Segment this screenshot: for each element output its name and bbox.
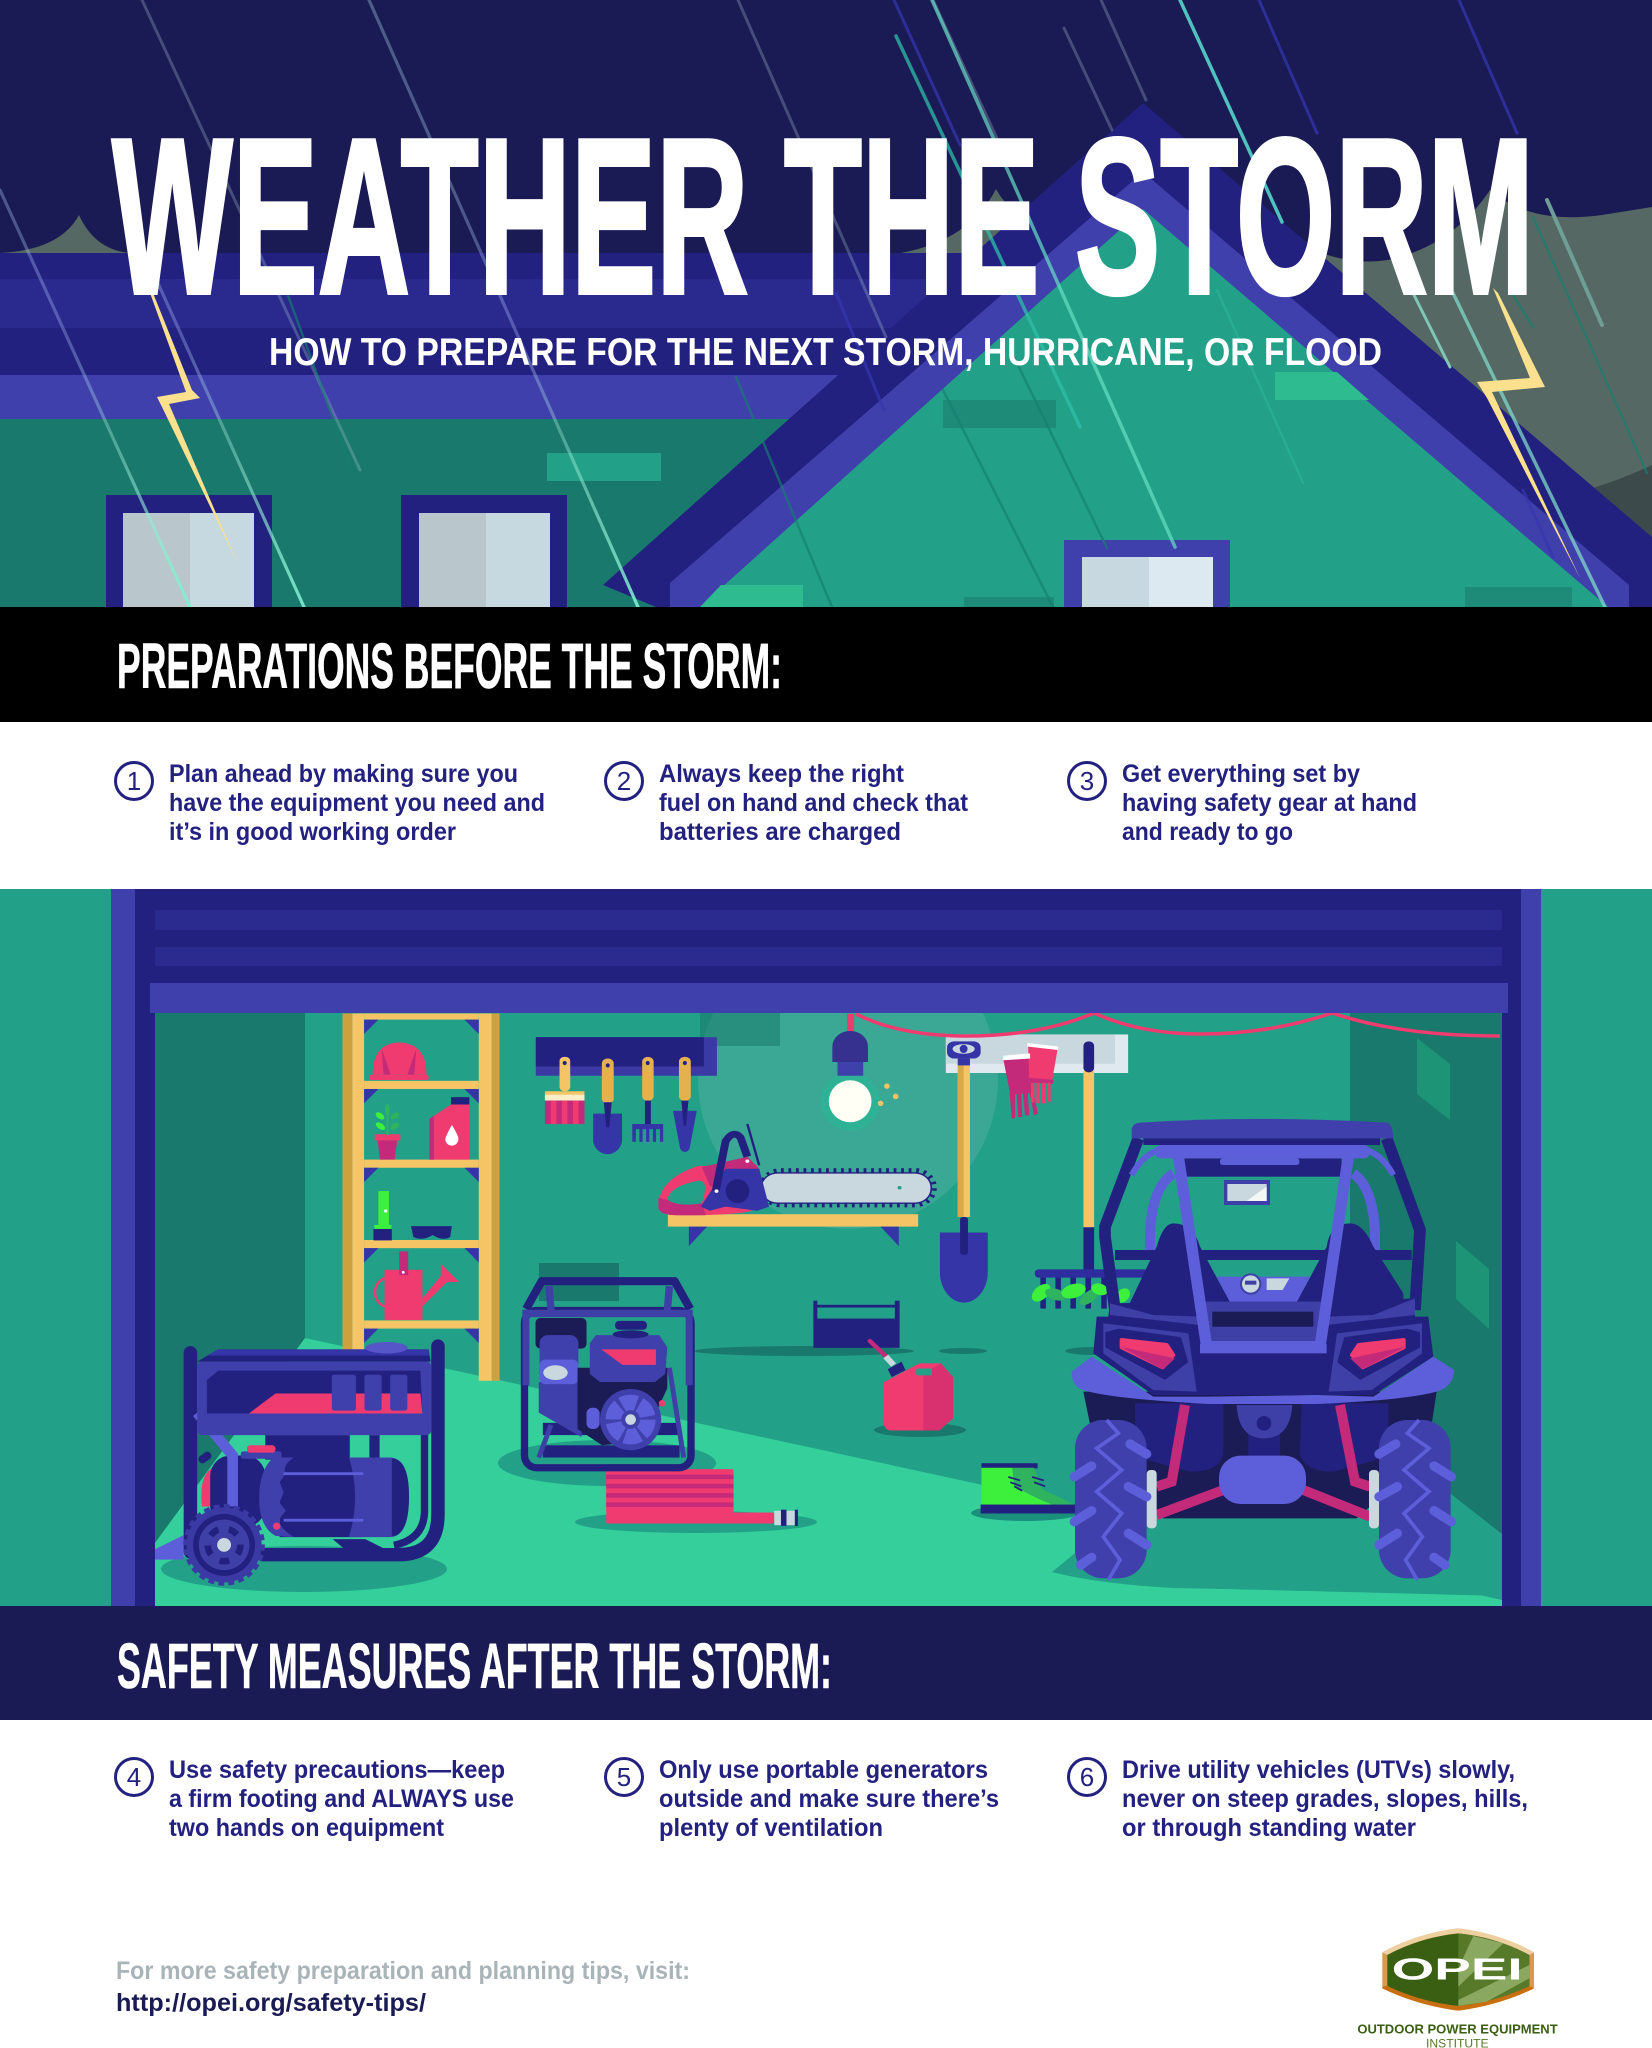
lamp glow bbox=[698, 1013, 998, 1229]
step 1: Plan ahead by making sure you bbox=[169, 760, 518, 788]
step 4: 4 bbox=[127, 1762, 141, 1792]
left wall bbox=[155, 1013, 305, 1543]
icon: portable generator bbox=[155, 1342, 438, 1582]
icon: work gloves bbox=[1003, 1043, 1059, 1119]
icon: flashlight bbox=[373, 1191, 392, 1240]
step 1: it’s in good working order bbox=[169, 818, 456, 846]
rear-view mirror bbox=[1224, 1180, 1270, 1205]
icon: light bulb bbox=[821, 1014, 898, 1131]
roll cage bbox=[1105, 1138, 1420, 1310]
subtitle: HOW TO PREPARE FOR THE NEXT STORM, HURRICANE, OR FLOOD bbox=[269, 331, 1382, 374]
shelving unit bbox=[342, 1013, 500, 1381]
utv floor shadow bbox=[1052, 1520, 1482, 1596]
icon: trowel bbox=[593, 1059, 622, 1154]
door frame right bbox=[1502, 889, 1541, 1606]
footer note bbox=[116, 1957, 690, 2017]
step 1: have the equipment you need and bbox=[169, 789, 545, 817]
step 2: batteries are charged bbox=[659, 818, 901, 846]
door frame left bbox=[111, 889, 155, 1606]
icon: coiled hose bbox=[606, 1469, 798, 1526]
attic window bbox=[1064, 540, 1230, 607]
lightning bolt right bbox=[1477, 288, 1580, 578]
icon: safety glasses bbox=[411, 1226, 452, 1239]
icon: open-frame generator bbox=[522, 1281, 693, 1468]
garage interior bbox=[155, 1013, 1502, 1606]
section band: before the storm bbox=[0, 607, 1652, 722]
utv lower chassis bbox=[1083, 1392, 1437, 1518]
icon: watering can bbox=[375, 1251, 459, 1320]
rear fender bbox=[1072, 1357, 1454, 1404]
group: wall tools and work bench bbox=[536, 1014, 1153, 1526]
middle window bbox=[401, 495, 567, 607]
logo: OPEI bbox=[1357, 1928, 1558, 2048]
step 4 bbox=[116, 1756, 514, 1842]
step 1: 1 bbox=[127, 766, 141, 796]
wall tool rack bbox=[536, 1037, 717, 1076]
step 6 bbox=[1068, 1756, 1528, 1842]
left window bbox=[106, 495, 272, 607]
icon: toolbox bbox=[813, 1301, 900, 1348]
step 2: fuel on hand and check that bbox=[659, 789, 969, 817]
logo: OPEI: OPEI bbox=[1392, 1952, 1523, 1986]
heading: safety measures: SAFETY MEASURES AFTER THE STORM: bbox=[117, 1630, 832, 1702]
icon: work boots bbox=[981, 1463, 1076, 1514]
section band: after the storm bbox=[0, 1606, 1652, 1720]
icon: utility vehicle (UTV) bbox=[1072, 1119, 1454, 1580]
step 3 bbox=[1068, 760, 1417, 846]
bench shelf bbox=[668, 1214, 918, 1246]
icon: gas can bbox=[870, 1341, 953, 1430]
logo: OPEI: OUTDOOR POWER EQUIPMENT bbox=[1357, 2022, 1558, 2036]
floor bbox=[155, 1338, 1502, 1606]
heading: preparations: PREPARATIONS BEFORE THE STORM: bbox=[117, 630, 782, 702]
storm clouds bbox=[1, 189, 1652, 537]
icon: garden spade bbox=[673, 1057, 697, 1152]
icon: chainsaw bbox=[658, 1124, 934, 1215]
step 5: Only use portable generators bbox=[659, 1756, 988, 1784]
step 5: outside and make sure there’s bbox=[659, 1785, 999, 1813]
panel: garage illustration bbox=[0, 889, 1652, 1606]
step 4: a firm footing and ALWAYS use bbox=[169, 1785, 514, 1813]
tail light right bbox=[1329, 1323, 1422, 1392]
lightning bolt left bbox=[150, 293, 237, 562]
dashboard bbox=[1217, 1273, 1310, 1303]
step 3: Get everything set by bbox=[1122, 760, 1360, 788]
icon: oil jug bbox=[429, 1097, 469, 1160]
step 2: Always keep the right bbox=[659, 760, 905, 788]
step 4: Use safety precautions—keep bbox=[169, 1756, 505, 1784]
rain streaks bbox=[0, 0, 1647, 607]
step 3: and ready to go bbox=[1122, 818, 1293, 846]
step 5: plenty of ventilation bbox=[659, 1814, 883, 1842]
icon: hard hat bbox=[369, 1042, 429, 1080]
footer note: http://opei.org/safety-tips/ bbox=[116, 1989, 426, 2017]
icon: leaf rake bbox=[1028, 1041, 1153, 1309]
roof bbox=[1132, 1119, 1393, 1138]
house wall siding bbox=[0, 253, 1000, 607]
rear tire right bbox=[1369, 1420, 1451, 1580]
right wall bbox=[1350, 1013, 1502, 1534]
seats bbox=[1123, 1223, 1231, 1317]
group: shelf, wall tools and generator bbox=[342, 1013, 500, 1381]
floor shadows bbox=[161, 1346, 1125, 1592]
footer note: For more safety preparation and planning tips, visit: bbox=[116, 1957, 690, 1985]
group: generators bbox=[155, 1281, 693, 1582]
tail light left bbox=[1103, 1323, 1197, 1392]
icon: hand rake bbox=[632, 1057, 663, 1142]
ceiling wire bbox=[856, 1013, 1500, 1036]
icon: potted plant bbox=[374, 1104, 401, 1160]
pegboard bbox=[946, 1034, 1128, 1073]
icon: shovel bbox=[940, 1041, 988, 1303]
garage door slats bbox=[155, 889, 1502, 983]
generator wheel bbox=[187, 1507, 262, 1582]
step 2: 2 bbox=[617, 766, 631, 796]
step 5: 5 bbox=[617, 1762, 631, 1792]
step 2 bbox=[606, 760, 969, 846]
step 6: Drive utility vehicles (UTVs) slowly, bbox=[1122, 1756, 1515, 1784]
step 3: 3 bbox=[1080, 766, 1094, 796]
suspension arms bbox=[1157, 1405, 1370, 1517]
step 6: or through standing water bbox=[1122, 1814, 1416, 1842]
rear body bbox=[1093, 1298, 1433, 1395]
step 1 bbox=[116, 760, 545, 846]
rear tire left bbox=[1074, 1420, 1157, 1580]
step 6: 6 bbox=[1080, 1762, 1094, 1792]
door header beam bbox=[150, 983, 1508, 1013]
step 3: having safety gear at hand bbox=[1122, 789, 1417, 817]
step 6: never on steep grades, slopes, hills, bbox=[1122, 1785, 1528, 1813]
panel: storm header illustration bbox=[0, 0, 1652, 607]
gabled roof bbox=[603, 103, 1652, 607]
step 4: two hands on equipment bbox=[169, 1814, 445, 1842]
step 5 bbox=[606, 1756, 999, 1842]
icon: paint brush bbox=[545, 1057, 584, 1124]
